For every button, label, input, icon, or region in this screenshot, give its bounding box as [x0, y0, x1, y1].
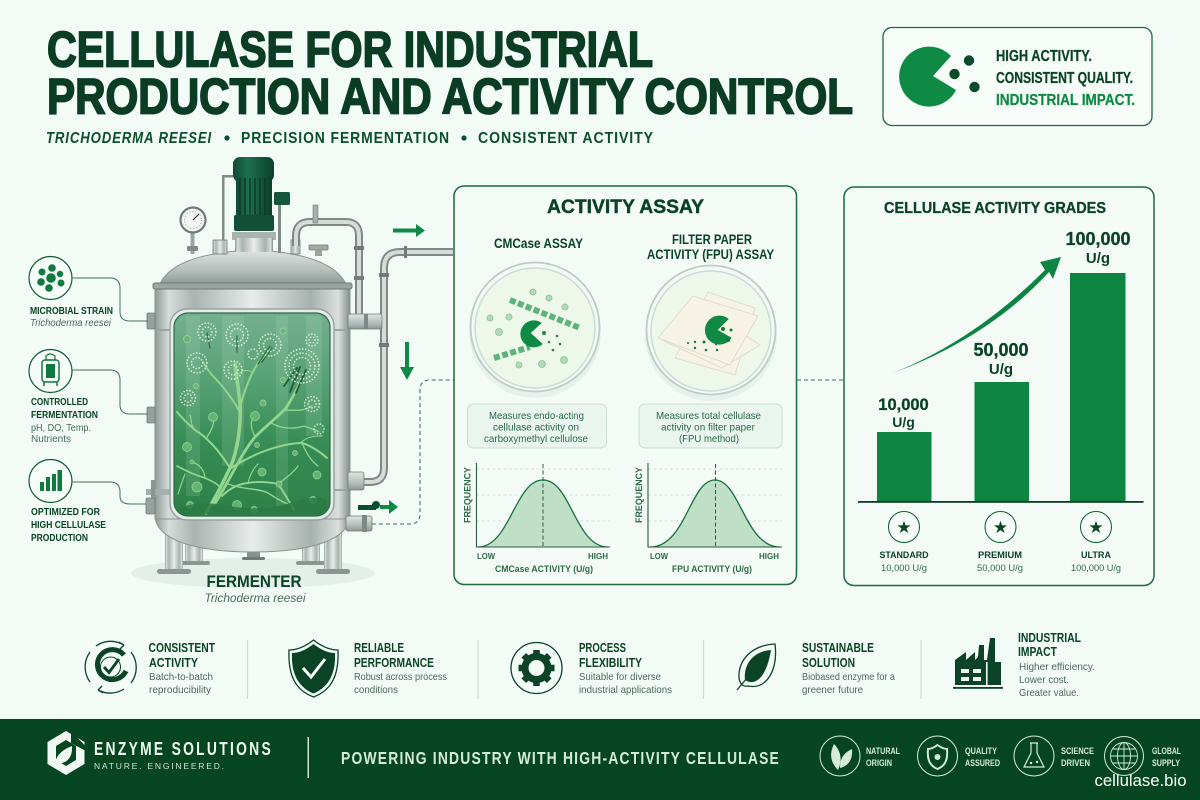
brand: NATURE. ENGINEERED.	[94, 761, 224, 771]
label	[31, 506, 106, 544]
label: PRODUCTION	[31, 532, 88, 544]
description box: FPU: Measures total cellulase	[656, 410, 761, 422]
panel: optimized production	[29, 460, 146, 544]
grade: ultra	[1071, 512, 1121, 574]
badge: quality assured: QUALITY	[965, 746, 997, 756]
panel: cellulase activity grades	[844, 187, 1154, 586]
text: greener future	[802, 684, 863, 696]
description box: FPU: activity on filter paper	[661, 422, 755, 434]
watermark: cellulase.bio	[1094, 772, 1186, 790]
label: Nutrients	[31, 434, 71, 445]
badge text: HIGH ACTIVITY.	[996, 48, 1092, 65]
subtitle: PRECISION FERMENTATION	[241, 130, 450, 147]
grade: premium: PREMIUM	[978, 550, 1022, 561]
heading: ACTIVITY ASSAY	[547, 197, 704, 218]
grade: standard: ★	[896, 518, 912, 538]
panel: microbial strain	[29, 256, 148, 329]
label: Trichoderma reesei	[30, 318, 112, 329]
grade: premium: ★	[993, 518, 1008, 538]
subtitle: CONSISTENT ACTIVITY	[478, 130, 654, 147]
grade: ultra: 100,000 U/g	[1071, 563, 1121, 574]
dashed connectors	[372, 380, 844, 524]
brand	[94, 739, 273, 771]
connector line	[72, 482, 146, 504]
description box: CMCase: carboxymethyl cellulose	[484, 433, 588, 445]
icon: cycle check	[85, 641, 136, 693]
tank bottom head	[155, 515, 350, 552]
description box: FPU: (FPU method)	[679, 433, 739, 445]
chart: CMCase distribution: FREQUENCY	[462, 466, 474, 523]
text: INDUSTRIAL	[1018, 631, 1081, 645]
chart: CMCase distribution: CMCase ACTIVITY (U/g)	[495, 564, 593, 574]
grade: standard: 10,000 U/g	[881, 563, 927, 574]
text	[354, 641, 447, 696]
spore heads	[180, 323, 324, 434]
tank rim	[153, 283, 352, 289]
icon: enzyme pacman	[899, 47, 980, 107]
badge: natural origin: ORIGIN	[866, 758, 892, 768]
top ports	[213, 240, 328, 256]
text: IMPACT	[1018, 645, 1057, 659]
chart: FPU distribution	[634, 463, 782, 574]
process pipes	[296, 205, 453, 482]
chart: FPU distribution: LOW	[650, 551, 669, 561]
badge: science driven: SCIENCE	[1061, 746, 1094, 756]
badge: science driven	[1014, 736, 1094, 776]
text	[1018, 631, 1095, 699]
panel: controlled fermentation	[29, 350, 148, 445]
sub-heading: CMCase: CMCase ASSAY	[494, 235, 584, 251]
chart: CMCase distribution: HIGH	[588, 551, 608, 561]
label	[30, 305, 113, 329]
text: conditions	[354, 684, 398, 696]
badge: science driven: DRIVEN	[1061, 758, 1090, 768]
benefit: reliable performance	[289, 640, 447, 697]
label	[31, 396, 98, 445]
icon: gear	[511, 642, 562, 694]
title: PRODUCTION AND ACTIVITY CONTROL	[47, 68, 853, 124]
icon: factory	[953, 638, 1003, 689]
badge: quality assured: ASSURED	[965, 758, 1000, 768]
text: SUSTAINABLE	[802, 641, 874, 655]
logo	[48, 731, 84, 775]
tank dome	[160, 250, 346, 284]
bar chart: U/g	[1086, 250, 1110, 267]
description box: FPU	[639, 404, 782, 448]
label: pH, DO, Temp.	[31, 423, 91, 434]
badge text	[996, 48, 1135, 109]
text: Robust across process	[354, 671, 447, 683]
bar chart: 100,000	[1065, 229, 1131, 249]
grade: standard: STANDARD	[880, 550, 929, 561]
sub-heading: FPU: FILTER PAPER	[672, 231, 752, 247]
text: industrial applications	[579, 684, 672, 696]
sub-heading: FPU	[647, 231, 775, 262]
flow arrows	[358, 224, 425, 514]
icon: microbes	[29, 256, 72, 300]
fungal mycelium	[177, 333, 327, 513]
description box: CMCase	[468, 404, 606, 448]
icon: rising bars	[29, 460, 72, 502]
tank body	[155, 287, 350, 519]
side nozzles	[146, 313, 382, 532]
petri dish: filter paper	[645, 266, 777, 401]
badge: global supply: GLOBAL	[1152, 746, 1181, 756]
chart: CMCase distribution	[462, 463, 610, 574]
text: SOLUTION	[802, 656, 855, 670]
text: PROCESS	[579, 641, 626, 655]
text: RELIABLE	[354, 641, 404, 655]
badge: global supply: SUPPLY	[1152, 758, 1180, 768]
label: FERMENTATION	[31, 409, 98, 421]
text: CONSISTENT	[148, 641, 215, 655]
subtitle	[46, 130, 654, 147]
text	[579, 641, 672, 696]
chart: FPU distribution: FREQUENCY	[634, 466, 645, 523]
title: CELLULASE FOR INDUSTRIAL	[47, 22, 653, 78]
ground shadow	[131, 558, 375, 588]
text: Higher efficiency.	[1019, 661, 1095, 673]
text: Suitable for diverse	[579, 671, 661, 683]
brand: ENZYME SOLUTIONS	[94, 739, 273, 759]
light streaks	[186, 316, 322, 506]
text: reproducibility	[149, 684, 212, 696]
icon: shield	[289, 640, 338, 697]
badge text: INDUSTRIAL IMPACT.	[996, 92, 1135, 109]
title	[47, 22, 853, 124]
label: MICROBIAL STRAIN	[30, 305, 113, 317]
bar chart: 50,000	[973, 340, 1029, 360]
grade: ultra: ULTRA	[1081, 550, 1111, 561]
badge: global supply	[1104, 736, 1181, 776]
callout badge: high activity	[883, 28, 1152, 126]
icon: mini fermenter	[29, 350, 72, 392]
benefit: consistent activity	[85, 641, 215, 696]
badge text: CONSISTENT QUALITY.	[996, 70, 1133, 87]
floating spheres	[182, 328, 321, 514]
biomass layer	[177, 498, 327, 514]
grade: premium: 50,000 U/g	[977, 563, 1023, 574]
label: CONTROLLED	[31, 396, 88, 408]
text: PERFORMANCE	[354, 656, 434, 670]
bar chart: 10,000	[878, 396, 929, 414]
grade: premium	[977, 512, 1023, 574]
chart: FPU distribution: FPU ACTIVITY (U/g)	[672, 564, 752, 574]
text: Batch-to-batch	[149, 671, 213, 683]
text	[802, 641, 895, 696]
text	[148, 641, 215, 696]
tagline: POWERING INDUSTRY WITH HIGH-ACTIVITY CELLULASE	[341, 748, 780, 768]
text: ACTIVITY	[149, 656, 199, 670]
connector line	[72, 278, 148, 321]
sub-heading: FPU: ACTIVITY (FPU) ASSAY	[647, 246, 775, 262]
bar chart: U/g	[989, 361, 1013, 378]
subtitle: TRICHODERMA REESEI	[46, 130, 212, 147]
fermenter label: FERMENTER	[206, 572, 302, 591]
label: OPTIMIZED FOR	[31, 506, 100, 518]
grade: standard	[880, 512, 929, 574]
text: Biobased enzyme for a	[802, 671, 895, 683]
panel: activity assay	[454, 186, 796, 584]
fermenter label	[204, 572, 306, 605]
badge: quality assured	[918, 736, 1000, 776]
legs	[157, 530, 350, 574]
text: Lower cost.	[1019, 674, 1069, 686]
bar chart	[858, 229, 1144, 503]
benefit: process flexibility	[511, 641, 672, 696]
label: HIGH CELLULASE	[31, 519, 106, 531]
fermenter label: Trichoderma reesei	[204, 593, 306, 605]
badge: natural origin: NATURAL	[866, 746, 900, 756]
viewing window	[170, 309, 334, 520]
trend arrow	[893, 257, 1061, 373]
chart: FPU distribution: HIGH	[759, 551, 779, 561]
text: Greater value.	[1019, 687, 1079, 699]
description box: CMCase: cellulase activity on	[493, 422, 579, 434]
badge: natural origin	[820, 736, 900, 776]
fermenter	[131, 157, 453, 605]
benefit: sustainable solution	[737, 641, 895, 696]
description box: CMCase: Measures endo-acting	[489, 410, 584, 422]
heading: CELLULASE ACTIVITY GRADES	[884, 200, 1106, 217]
motor	[222, 157, 290, 253]
grade: ultra: ★	[1088, 518, 1104, 538]
icon: leaf	[737, 644, 776, 690]
benefit: industrial impact	[953, 631, 1095, 699]
text: FLEXIBILITY	[579, 656, 643, 670]
bar chart: U/g	[892, 414, 915, 430]
chart: CMCase distribution: LOW	[477, 551, 496, 561]
footer band	[0, 719, 1200, 800]
icon: pressure gauge	[180, 208, 206, 254]
petri dish: CMCase	[469, 262, 601, 398]
connector line	[72, 370, 148, 414]
